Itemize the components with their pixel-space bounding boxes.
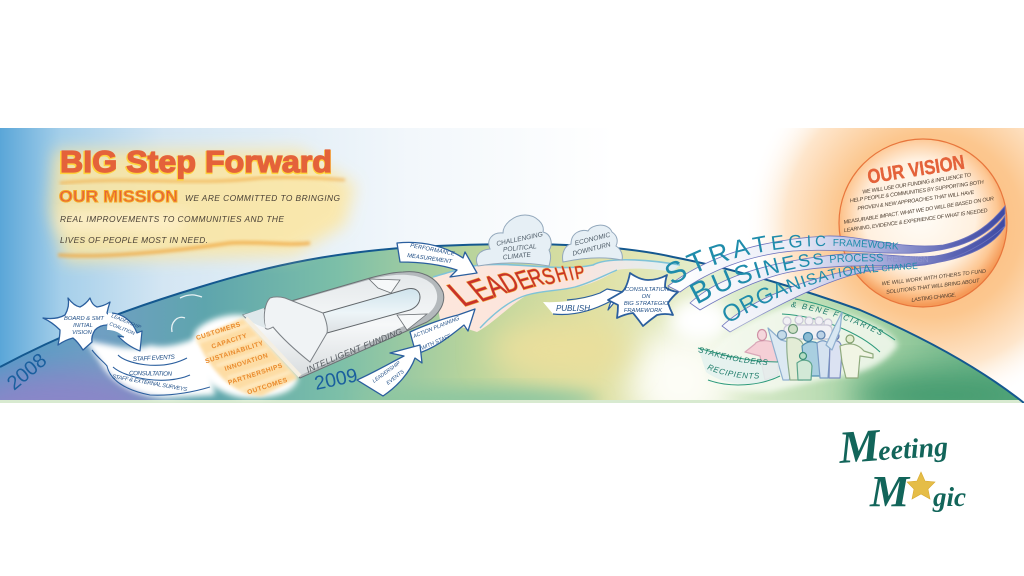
arrow: performance measurement (397, 242, 477, 277)
year 2008: 2008 (3, 349, 51, 395)
mission statement (59, 188, 340, 245)
logo: Meeting Magic (836, 415, 966, 516)
ribbon text: business process redesign: BUSINESS PROCESS REDESIGN (689, 253, 928, 304)
halo (705, 305, 898, 392)
green figure (787, 338, 804, 380)
LEADERSHIP heading: E (460, 272, 502, 308)
cloud: challenging political climate (476, 215, 551, 266)
arrow: performance measurement: MEASUREMENT (407, 253, 453, 265)
star: consultation on big strategic framework: ON (642, 294, 651, 300)
vision text: PROVEN & NEW APPROACHES THAT WILL HAVE (857, 190, 975, 212)
swath: early activities (85, 335, 215, 398)
crowd (745, 312, 873, 380)
vision text: MEASURABLE IMPACT. WHAT WE DO WILL BE BASED ON OUR (843, 196, 994, 226)
flow lines: staff events, consultation, surveys: STAFF EVENTS (133, 354, 176, 363)
star: consultation on big strategic framework: BIG STRATEGIC (624, 301, 669, 307)
mission statement: REAL IMPROVEMENTS TO COMMUNITIES AND THE (60, 214, 284, 224)
ribbon text: strategic framework: STRATEGIC FRAMEWORK (666, 234, 898, 283)
star: board & SMT vision: INITIAL (73, 323, 93, 329)
banner: stakeholders recipients (698, 347, 780, 386)
year 2009: 2009 (312, 364, 359, 395)
arrow: leadership events: EVENTS (386, 369, 406, 387)
logo word: Meeting: Meeting (836, 415, 949, 473)
star: board & SMT vision (43, 298, 112, 350)
cloud: challenging political climate: POLITICAL (503, 243, 537, 254)
arrow: leadership coalition: LEADERSHIP (110, 313, 142, 331)
LEADERSHIP heading: H (552, 261, 570, 286)
icon: gold star (907, 472, 935, 499)
vision text: SOLUTIONS THAT WILL BRING ABOUT (886, 278, 981, 296)
sun disc: our vision (839, 139, 1007, 307)
cloud: priorities: CUSTOMERS (195, 321, 242, 342)
mission statement: WE ARE COMMITTED TO BRINGING (185, 193, 340, 203)
sky background (0, 128, 488, 366)
banner: stakeholders recipients: RECIPIENTS (707, 364, 759, 378)
banner illustration (0, 128, 1024, 403)
arrow: action planning with staff: WITH STAFF (420, 333, 453, 352)
cloud: priorities: OUTCOMES (246, 377, 289, 396)
star: board & SMT vision: BOARD & SMT (64, 316, 104, 322)
vision heading: OUR VISION (866, 152, 966, 189)
LEADERSHIP heading: S (539, 264, 559, 290)
arrow: publish: PUBLISH (556, 304, 590, 313)
vision text (843, 172, 994, 304)
LEADERSHIP heading: E (511, 265, 538, 296)
cloud: economic downturn: ECONOMIC (574, 232, 611, 247)
vision text: WE WILL USE OUR FUNDING & INFLUENCE TO (862, 172, 972, 196)
vision text: LEARNING, EVIDENCE & EXPERIENCE OF WHAT IS NEEDED (844, 208, 988, 234)
cloud: economic downturn (563, 225, 622, 262)
vision text: HELP PEOPLE & COMMUNITIES BY SUPPORTING BOTH (850, 180, 984, 204)
arrow: action planning with staff (410, 309, 475, 354)
sun glow (761, 128, 1024, 380)
mission statement: OUR MISSION (59, 188, 178, 206)
star: consultation on big strategic framework (608, 273, 678, 326)
cloud: priorities: PARTNERSHIPS (227, 362, 284, 387)
ribbon text: organisational change: ORGANISATIONAL CHANGE (723, 262, 918, 321)
flow lines: staff events, consultation, surveys: STAFF & EXTERNAL SURVEYS (112, 374, 188, 393)
LEADERSHIP heading: I (567, 263, 576, 284)
mission statement: LIVES OF PEOPLE MOST IN NEED. (60, 235, 208, 245)
star: board & SMT vision: VISION (72, 330, 93, 336)
band: strategic framework (668, 206, 1005, 292)
logo word: Magic: M (869, 467, 911, 516)
pink figure (745, 341, 778, 380)
teal figure (802, 342, 822, 376)
strategy ribbon (666, 205, 1006, 332)
vision text: LASTING CHANGE. (911, 292, 957, 304)
band: business process redesign (690, 216, 1005, 310)
rocket: intelligent funding: INTELLIGENT FUNDING (306, 328, 402, 373)
cloud: priorities: CAPACITY (211, 332, 248, 351)
vision text: WE WILL WORK WITH OTHERS TO FUND (881, 269, 986, 287)
cloud: priorities (194, 315, 298, 398)
banner: beneficiaries: & BENE FICIARIES (791, 302, 883, 335)
blue tall figure (768, 328, 796, 380)
flow lines: staff events, consultation, surveys (92, 350, 210, 395)
cloud: priorities: SUSTAINABILITY (204, 340, 265, 365)
LEADERSHIP heading: P (573, 262, 586, 283)
LEADERSHIP heading: D (493, 267, 525, 299)
arrow: leadership coalition: COALITION (108, 321, 136, 337)
planet horizon line (0, 244, 1024, 403)
cloud: challenging political climate: CLIMATE (503, 251, 532, 261)
flow lines: staff events, consultation, surveys: CONSULTATION (129, 370, 173, 378)
raised arm (826, 312, 842, 350)
LEADERSHIP heading: R (523, 263, 548, 292)
arrow: leadership events (357, 345, 422, 396)
LEADERSHIP heading: A (477, 269, 513, 303)
mission glow (50, 150, 355, 262)
planet (0, 245, 1022, 403)
blue figure (817, 341, 830, 378)
infographic canvas (0, 128, 1024, 512)
band: organisational change (722, 226, 1005, 332)
cloud: challenging political climate: CHALLENGING (496, 231, 544, 248)
cloud: economic downturn: DOWNTURN (572, 241, 612, 258)
LEADERSHIP heading: L (438, 274, 486, 314)
LEADERSHIP heading (446, 266, 584, 307)
cloud wisp (172, 295, 202, 332)
child figure (797, 360, 812, 380)
arrow: leadership coalition (107, 313, 142, 351)
arrow: action planning with staff: ACTION PLANNING (412, 316, 461, 340)
rocket: intelligent funding (242, 271, 444, 378)
pale green figure waving (840, 344, 873, 378)
stakeholders group (698, 298, 900, 394)
arrow: performance measurement: PERFORMANCE (410, 243, 455, 258)
star: consultation on big strategic framework: CONSULTATION (625, 287, 670, 293)
leadership ribbon (433, 260, 680, 332)
arrow: leadership events: LEADERSHIP (372, 360, 402, 385)
dark blue figure (829, 341, 842, 378)
title: BIG Step Forward (59, 145, 332, 180)
banner: beneficiaries (782, 298, 896, 352)
arrow: publish (543, 289, 623, 314)
star: consultation on big strategic framework: FRAMEWORK (624, 308, 663, 314)
cloud: priorities: INNOVATION (224, 352, 269, 373)
title: BIG Step Forward (60, 144, 332, 179)
logo word: Magic: gic (932, 482, 966, 512)
banner: stakeholders recipients: STAKEHOLDERS (698, 347, 768, 365)
